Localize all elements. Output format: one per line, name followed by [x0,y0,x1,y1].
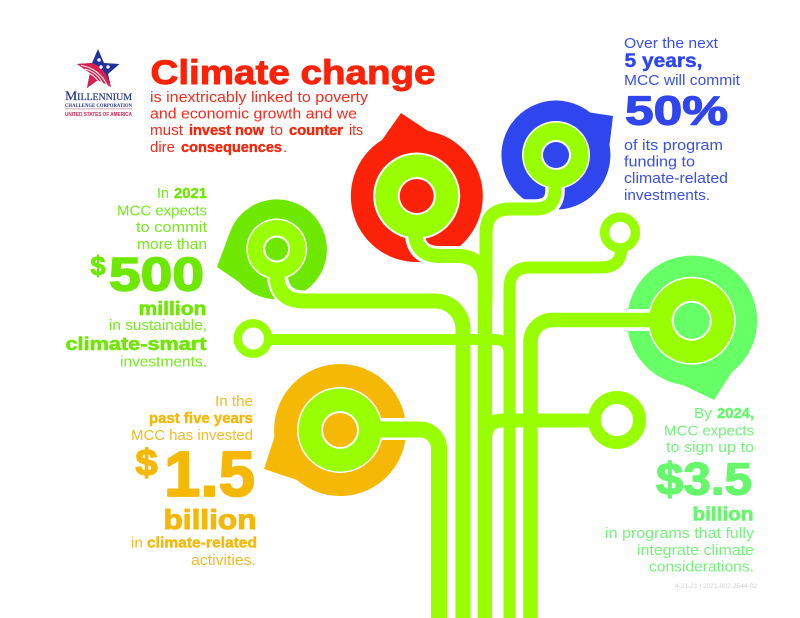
intro text: must [150,122,184,139]
callout: orange $1.5 billion: in [131,534,143,552]
ring: blue node [522,121,590,189]
bubble: red [351,113,483,262]
callout: lime $500 million: 500 [109,248,204,300]
callout: blue 50%: MCC will commit [624,72,741,89]
icon: star [77,49,120,88]
callout: orange $1.5 billion [131,393,257,569]
intro text: and economic growth and we [150,106,357,122]
callout: mint $3.5 billion: to sign up to [666,439,754,456]
callout: blue 50%: of its program [624,137,723,154]
callout: mint $3.5 billion: integrate climate [637,542,754,559]
callout: lime $500 million [66,185,208,370]
callout: lime $500 million: MCC expects [117,202,207,220]
callout: blue 50%: 5 years, [624,50,702,72]
intro text: its [349,122,363,139]
logo: Millennium Challenge Corporation [65,49,132,118]
callout: lime $500 million: In [157,185,169,202]
callout: lime $500 million: climate-smart [66,333,206,354]
intro text [150,89,369,156]
callout: blue 50% [624,35,741,204]
callout: orange $1.5 billion: In the [215,393,253,410]
callout: blue 50%: investments. [624,187,710,204]
ring: red node [373,152,460,240]
bubble: mint [627,256,757,400]
open ring: left [238,323,268,354]
callout: mint $3.5 billion [605,405,755,576]
logo country line: UNITED STATES OF AMERICA [65,112,132,118]
intro text: consequences [181,139,282,156]
footer code: 4-21-21 | 2021-002-2544-02 [675,584,758,590]
callout: blue 50%: funding to [624,154,695,170]
intro text: to [270,122,283,139]
title: Climate change [150,54,436,92]
logo subline: CHALLENGE CORPORATION [65,103,132,109]
callout: lime $500 million: 2021 [174,185,207,202]
pipe outline cuts through bubbles [277,180,660,429]
logo wordmark: Millennium [65,89,132,103]
tree graphic [217,101,757,618]
callout: mint $3.5 billion: billion [692,504,754,526]
intro text: counter [289,122,343,139]
ring: lime node [246,218,307,280]
bubble: orange [264,364,406,496]
open ring: lower right [594,398,640,442]
title block [150,54,436,156]
intro text: invest now [189,122,264,139]
callout: lime $500 million: more than [137,236,207,253]
callout: mint $3.5 billion: $3.5 [656,454,752,504]
callout: lime $500 million: in sustainable, [109,317,207,334]
callout: orange $1.5 billion: activities. [191,552,256,569]
pipes [270,184,650,618]
callout: orange $1.5 billion: billion [164,504,256,535]
intro text: is inextricably linked to poverty [150,89,369,106]
callout: mint $3.5 billion: 2024, [717,405,754,422]
open ring: upper right [605,217,635,248]
callout: lime $500 million: to commit [136,219,208,236]
intro text: . [283,139,287,156]
callout: orange $1.5 billion: 1.5 [164,438,255,510]
callout: blue 50%: Over the next [624,35,719,52]
callout: orange $1.5 billion: $ [136,442,158,483]
ring: mint node [648,277,736,365]
callout: blue 50%: 50% [625,88,728,134]
callout: mint $3.5 billion: considerations. [649,558,754,576]
callout: lime $500 million: million [138,299,206,320]
callout: orange $1.5 billion: past five years [149,410,253,427]
callout: lime $500 million: $ [90,251,106,281]
callout: orange $1.5 billion: MCC has invested [131,427,253,444]
callout: mint $3.5 billion: in programs that fully [605,525,755,542]
bubble: blue [501,101,613,210]
callout: mint $3.5 billion: MCC expects [664,422,754,440]
callout: orange $1.5 billion: climate-related [147,534,257,552]
callout: blue 50%: climate-related [624,170,728,187]
callout: lime $500 million: investments. [120,354,207,370]
ring: orange node [297,387,383,473]
callout: mint $3.5 billion: By [694,405,713,422]
bubble: lime [217,199,327,299]
intro text: dire [150,139,175,156]
